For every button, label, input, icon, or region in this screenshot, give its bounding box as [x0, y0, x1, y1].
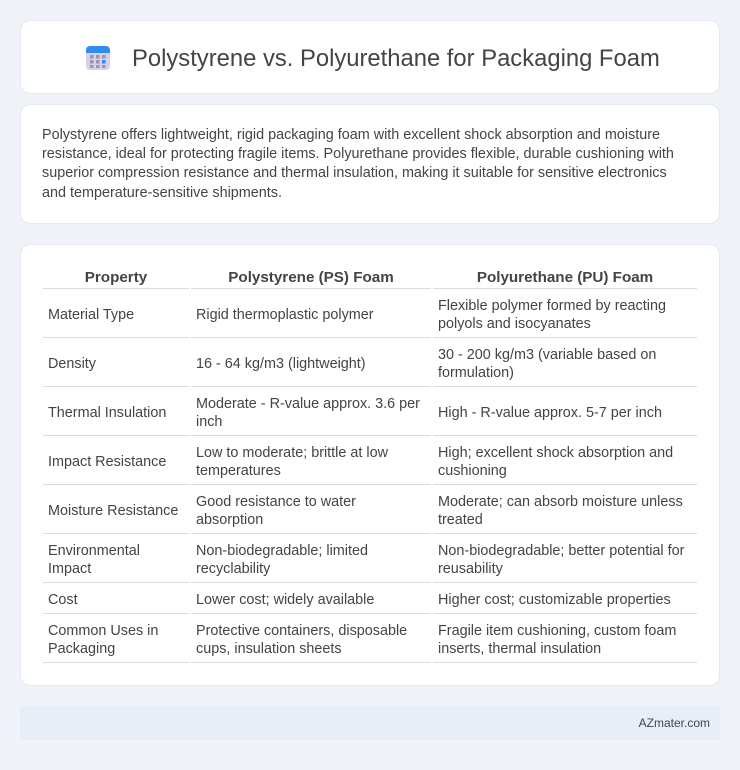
text: Higher cost; customizable properties	[438, 592, 671, 608]
text: Moderate - R-value approx. 3.6 per	[196, 396, 420, 412]
row: material type: Material Type	[48, 307, 134, 323]
row: thermal insulation: Thermal Insulation	[48, 405, 166, 421]
header: property: Property	[85, 269, 147, 286]
panel: summary	[20, 104, 720, 224]
row: moisture resistance: Moisture Resistance	[48, 503, 178, 519]
text: absorption	[196, 512, 263, 528]
row: impact resistance: Impact Resistance	[48, 454, 166, 470]
summary text: Polystyrene offers lightweight, rigid packaging foam with excellent shock absorption and moisture	[42, 127, 660, 143]
text: Flexible polymer formed by reacting	[438, 298, 666, 314]
panel: title card	[20, 20, 720, 94]
row: environmental impact: Impact	[48, 561, 91, 577]
summary text: and temperature-sensitive shipments.	[42, 185, 282, 201]
icon: calendar	[86, 46, 110, 70]
text: cushioning	[438, 463, 507, 479]
text: Lower cost; widely available	[196, 592, 374, 608]
text: Fragile item cushioning, custom foam	[438, 623, 676, 639]
text: cups, insulation sheets	[196, 641, 342, 657]
footer: source credit: AZmater.com	[639, 716, 710, 730]
footer bar	[20, 706, 720, 740]
text: formulation)	[438, 365, 514, 381]
row: common uses: Packaging	[48, 641, 115, 657]
row: environmental impact	[48, 543, 140, 577]
text: Moderate; can absorb moisture unless	[438, 494, 683, 510]
text: Good resistance to water	[196, 494, 356, 510]
text: Non-biodegradable; limited	[196, 543, 368, 559]
text: temperatures	[196, 463, 281, 479]
text: Low to moderate; brittle at low	[196, 445, 388, 461]
text: High; excellent shock absorption and	[438, 445, 673, 461]
row: environmental impact: Environmental	[48, 543, 140, 559]
row: cost: Cost	[48, 592, 78, 608]
panel: comparison table card	[20, 244, 720, 686]
text: Protective containers, disposable	[196, 623, 407, 639]
text: High - R-value approx. 5-7 per inch	[438, 405, 662, 421]
summary text: superior compression resistance and thermal insulation, making it suitable for sensitive electronics	[42, 165, 667, 181]
header: polystyrene: Polystyrene (PS) Foam	[228, 269, 394, 286]
text: inch	[196, 414, 222, 430]
row: density: Density	[48, 356, 96, 372]
text: polyols and isocyanates	[438, 316, 591, 332]
row: common uses	[48, 623, 158, 657]
text: 30 - 200 kg/m3 (variable based on	[438, 347, 656, 363]
row: common uses: Common Uses in	[48, 623, 158, 639]
header: polyurethane: Polyurethane (PU) Foam	[477, 269, 653, 286]
title: Polystyrene vs. Polyurethane for Packaging Foam	[132, 45, 660, 72]
text: treated	[438, 512, 483, 528]
summary text: resistance, ideal for protecting fragile items. Polyurethane provides flexible, durable cushioning with	[42, 146, 674, 162]
text: recyclability	[196, 561, 270, 577]
text: Non-biodegradable; better potential for	[438, 543, 684, 559]
summary text	[42, 127, 674, 201]
text: 16 - 64 kg/m3 (lightweight)	[196, 356, 366, 372]
text: inserts, thermal insulation	[438, 641, 601, 657]
text: reusability	[438, 561, 503, 577]
text: Rigid thermoplastic polymer	[196, 307, 374, 323]
